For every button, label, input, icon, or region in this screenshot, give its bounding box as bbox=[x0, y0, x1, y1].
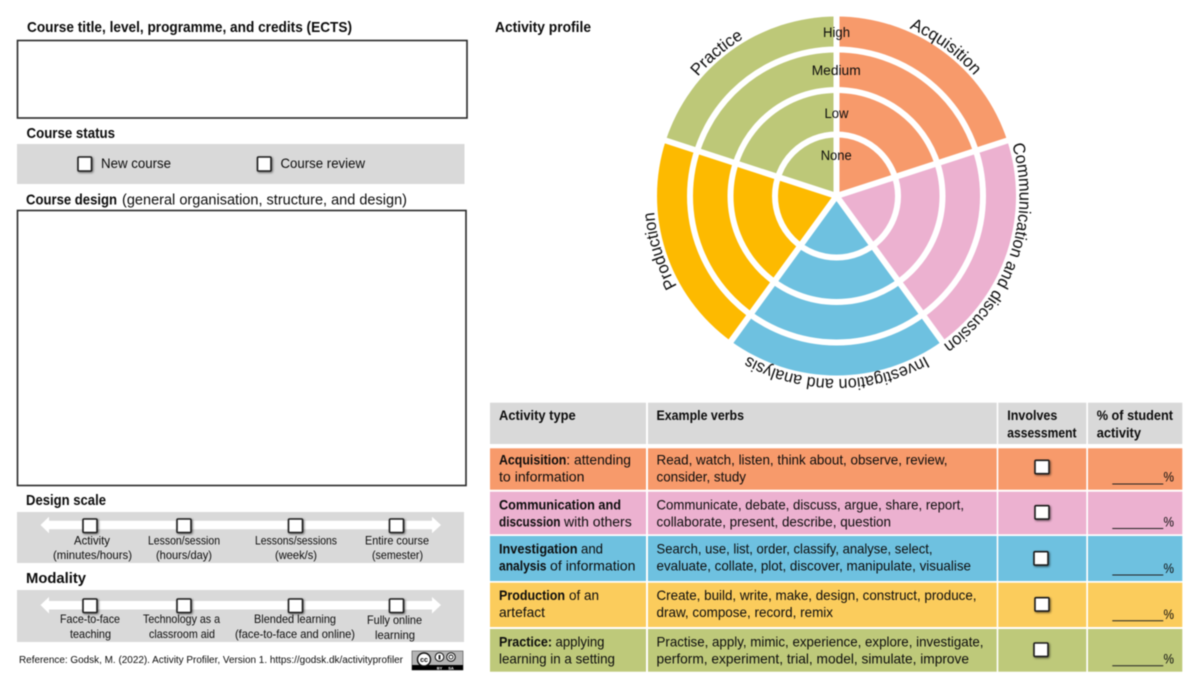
label: lessons/sessions bbox=[255, 534, 337, 562]
table row: production: of an bbox=[569, 587, 599, 603]
checkbox: online bbox=[390, 599, 404, 612]
table row: practice: perform, experiment, trial, model, simulate, improve bbox=[656, 651, 969, 667]
label: course review: Course review bbox=[280, 155, 366, 171]
table row: investigation and analysis: and bbox=[581, 541, 603, 557]
label: activity: Activity bbox=[74, 534, 110, 548]
table row: investigation and analysis: of information bbox=[550, 558, 636, 574]
checkbox: course review bbox=[258, 157, 271, 171]
table row: practice: learning in a setting bbox=[499, 651, 615, 667]
table row: investigation and analysis bbox=[490, 536, 1182, 581]
sector label: production: Production bbox=[644, 212, 677, 291]
table row: acquisition: consider, study bbox=[656, 469, 746, 485]
label: technology bbox=[143, 612, 220, 641]
table row: practice: Practice: bbox=[499, 633, 552, 649]
label: lesson/session: Lesson/session bbox=[148, 534, 220, 548]
table row: production bbox=[490, 583, 1182, 627]
table row: investigation and analysis: Search, use, list, order, classify, analyse, select, bbox=[656, 541, 932, 557]
table row: communication and discussion: collaborate, present, describe, question bbox=[656, 513, 891, 529]
table row: communication and discussion: % bbox=[1164, 514, 1174, 530]
reference line: Reference: Godsk, M. (2022). Activity Profiler, Version 1. https://godsk.dk/activityprofiler bbox=[19, 655, 404, 666]
table row: communication and discussion: discussion bbox=[499, 513, 560, 529]
label: lessons/sessions: Lessons/sessions bbox=[255, 534, 337, 548]
table row: investigation and analysis: % bbox=[1164, 560, 1174, 576]
checkbox: face-to-face bbox=[83, 599, 97, 612]
label: online bbox=[367, 613, 422, 642]
sector: practice bbox=[666, 16, 836, 196]
panel: modality bbox=[17, 570, 464, 642]
table header: activity bbox=[1097, 424, 1141, 440]
checkbox: technology bbox=[177, 599, 191, 612]
checkbox: lessons bbox=[288, 519, 302, 532]
table row: production: Production bbox=[499, 587, 565, 603]
table row: practice bbox=[490, 629, 1182, 672]
table header: assessment bbox=[1007, 424, 1077, 440]
heading: course title: Course title, level, programme, and credits (ECTS) bbox=[27, 19, 352, 36]
sector label: investigation and analysis: Investigation and analysis bbox=[744, 356, 930, 391]
table row: investigation and analysis: evaluate, collate, plot, discover, manipulate, visualise bbox=[656, 558, 971, 574]
label: blended: Blended learning bbox=[254, 612, 336, 626]
table row: communication and discussion bbox=[490, 492, 1182, 534]
table row: communication and discussion: Communication and bbox=[499, 496, 621, 512]
label: entire course bbox=[365, 534, 429, 562]
sector label: practice: Practice bbox=[690, 32, 742, 76]
panel: course title bbox=[18, 19, 467, 118]
checkbox: lesson bbox=[177, 519, 191, 532]
label: face-to-face: Face-to-face bbox=[60, 612, 120, 626]
label: face-to-face: teaching bbox=[70, 627, 111, 641]
table row: practice: % bbox=[1164, 650, 1174, 666]
table row: production: draw, compose, record, remix bbox=[656, 604, 833, 620]
label: online: learning bbox=[375, 628, 415, 642]
table row: investigation and analysis: Investigation bbox=[499, 541, 578, 557]
table header: Involves bbox=[1007, 407, 1057, 423]
status background bbox=[17, 144, 464, 184]
scale label: high: High bbox=[823, 24, 850, 40]
sector label: communication and discussion: Communication and discussion bbox=[944, 142, 1032, 352]
label: new course: New course bbox=[101, 155, 171, 171]
icon: cc by-sa badge: cc bbox=[420, 657, 428, 664]
sector: acquisition bbox=[836, 16, 1007, 196]
label: lessons/sessions: (week/s) bbox=[275, 548, 317, 562]
label: face-to-face bbox=[60, 612, 120, 641]
label: lesson/session bbox=[148, 534, 220, 562]
table row: acquisition: : attending bbox=[566, 452, 631, 468]
scale label: none: None bbox=[821, 147, 852, 163]
table: activity types bbox=[490, 403, 1182, 672]
label: blended bbox=[235, 612, 355, 641]
scale label: medium: Medium bbox=[812, 62, 861, 78]
table row: production: artefact bbox=[499, 604, 545, 620]
table row: practice: Practise, apply, mimic, experience, explore, investigate, bbox=[656, 633, 984, 649]
label: lesson/session: (hours/day) bbox=[156, 548, 212, 562]
heading note: course design: (general organisation, structure, and design) bbox=[122, 192, 407, 208]
heading: design scale: Design scale bbox=[26, 492, 106, 509]
scale background bbox=[17, 512, 464, 563]
sector: investigation and analysis bbox=[731, 196, 942, 375]
label: online: Fully online bbox=[367, 613, 422, 627]
chart: activity profile wheel bbox=[644, 16, 1032, 391]
table row: acquisition bbox=[490, 448, 1182, 490]
label: activity: (minutes/hours) bbox=[53, 548, 132, 562]
table row: acquisition: Acquisition bbox=[499, 452, 566, 468]
heading: course design: Course design bbox=[26, 192, 117, 208]
heading: modality: Modality bbox=[26, 570, 87, 587]
table row: acquisition: Read, watch, listen, think about, observe, review, bbox=[656, 452, 948, 468]
icon: cc by-sa badge bbox=[412, 651, 463, 670]
table header bbox=[490, 403, 1182, 444]
table row: practice: applying bbox=[556, 633, 604, 649]
input box: course design bbox=[18, 210, 466, 486]
input box: course title bbox=[18, 40, 467, 118]
label: entire course: (semester) bbox=[372, 548, 423, 562]
label: blended: (face-to-face and online) bbox=[235, 627, 355, 641]
label: technology: Technology as a bbox=[143, 612, 220, 626]
table row: production: % bbox=[1164, 606, 1174, 622]
sector: communication and discussion bbox=[836, 140, 1016, 341]
checkbox: activity bbox=[83, 519, 97, 532]
icon: cc by-sa badge: BY bbox=[437, 665, 443, 670]
arrow: modality bbox=[40, 597, 441, 614]
panel: course status bbox=[17, 125, 464, 184]
sector label: acquisition: Acquisition bbox=[909, 18, 980, 76]
table row: production: Create, build, write, make, design, construct, produce, bbox=[656, 587, 976, 603]
heading: course status: Course status bbox=[26, 125, 115, 142]
checkbox: blended bbox=[288, 599, 302, 612]
table row: acquisition: % bbox=[1164, 469, 1174, 485]
table header: Example verbs bbox=[656, 407, 744, 423]
panel: design scale bbox=[17, 492, 464, 563]
icon: cc by-sa badge: SA bbox=[448, 665, 454, 670]
sector: production bbox=[657, 140, 836, 341]
checkbox: entire course bbox=[390, 519, 404, 532]
panel: course design bbox=[18, 192, 466, 486]
checkbox: new course bbox=[78, 157, 92, 171]
modality background bbox=[17, 590, 464, 642]
label: entire course: Entire course bbox=[365, 534, 429, 548]
table row: acquisition: to information bbox=[499, 469, 584, 485]
label: activity bbox=[53, 534, 132, 562]
table header: Activity type bbox=[499, 407, 576, 423]
table row: communication and discussion: Communicate, debate, discuss, argue, share, report, bbox=[656, 496, 964, 512]
table header: % of student bbox=[1097, 407, 1173, 423]
table row: communication and discussion: with others bbox=[563, 513, 632, 529]
label: technology: classroom aid bbox=[149, 627, 215, 641]
heading: activity profile: Activity profile bbox=[495, 19, 591, 36]
table row: investigation and analysis: analysis bbox=[499, 558, 547, 574]
scale label: low: Low bbox=[824, 105, 849, 121]
arrow: design scale bbox=[40, 517, 441, 533]
